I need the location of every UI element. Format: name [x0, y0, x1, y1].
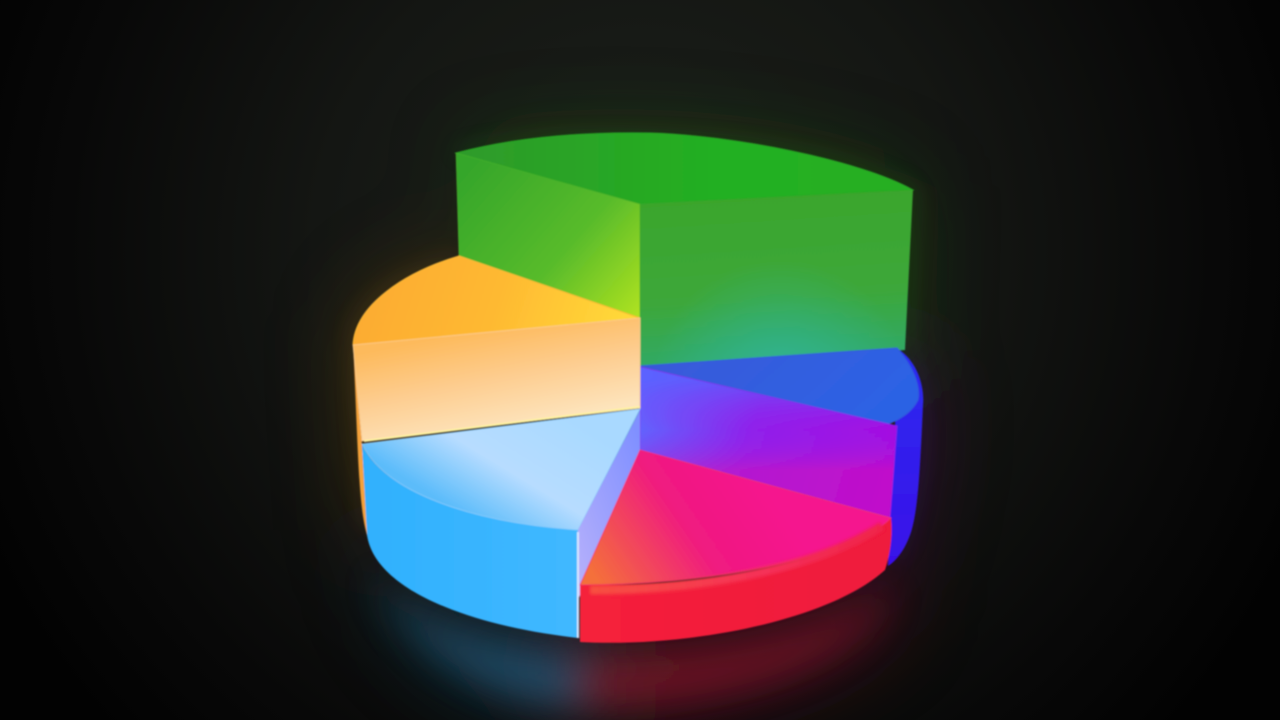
floor reflection [372, 570, 890, 705]
close edge glow [353, 138, 922, 560]
red outer wall [580, 518, 892, 643]
light blue top surface [362, 409, 640, 530]
slice: dark blue outer wall [888, 349, 923, 566]
green right face [640, 190, 913, 366]
white seam [577, 532, 579, 638]
slice: green [456, 133, 913, 366]
red rounded rim highlight [590, 526, 882, 590]
slice: red [578, 450, 892, 643]
light blue outer wall [362, 445, 578, 638]
wide glow halo [353, 137, 921, 700]
lavender cut face [578, 410, 640, 600]
slice: blue top [640, 348, 919, 425]
orange outer wall [353, 343, 368, 538]
pie chart [353, 133, 923, 643]
orange top surface [353, 256, 640, 345]
slice: orange [353, 256, 640, 538]
green left face [456, 153, 640, 318]
red top surface [580, 450, 891, 585]
green top surface [456, 133, 913, 204]
slice: purple face [640, 367, 897, 518]
slice: light blue [362, 407, 640, 638]
orange front face [353, 318, 640, 441]
orange highlight seam [364, 407, 640, 441]
